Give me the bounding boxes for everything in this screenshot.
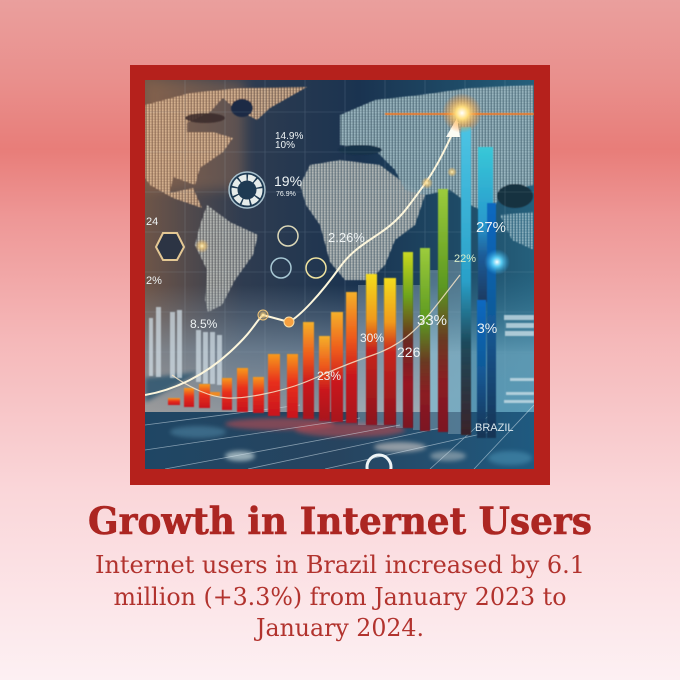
flare at arrow tip xyxy=(385,93,534,133)
chart percentage labels: 226 xyxy=(397,344,421,360)
bar chart xyxy=(168,127,496,438)
chart percentage labels: BRAZIL xyxy=(475,422,514,434)
chart percentage labels: 3% xyxy=(477,320,497,336)
map grid xyxy=(145,80,534,353)
chart percentage labels: 19% xyxy=(274,173,302,189)
chart percentage labels: 10% xyxy=(275,140,295,151)
bar: red group xyxy=(168,354,298,418)
map: North America xyxy=(145,87,307,208)
chart percentage labels: 23% xyxy=(317,369,341,383)
floor panel xyxy=(145,412,534,470)
chart percentage labels: 22% xyxy=(454,253,476,265)
red frame xyxy=(130,65,550,485)
framed chart illustration xyxy=(130,65,550,485)
bright pale stripes between bars xyxy=(358,260,461,434)
bar: yellow group xyxy=(366,274,396,425)
chart percentage labels: 76.9% xyxy=(276,191,296,198)
grey background bars xyxy=(149,307,222,385)
growth curve with arrow xyxy=(145,118,460,395)
chart percentage labels: 2% xyxy=(146,275,162,287)
chart percentage labels: 2.26% xyxy=(328,230,365,245)
description text: January 2024. xyxy=(253,614,424,642)
chart percentage labels: 33% xyxy=(417,312,447,329)
hazy lower band xyxy=(145,293,438,412)
bar: orange group xyxy=(303,292,357,423)
ring gauge icon xyxy=(229,172,265,208)
map and chart nodes xyxy=(196,240,208,252)
map: Africa and Middle East xyxy=(300,160,425,280)
map: South America xyxy=(195,205,258,312)
heading: Growth in Internet Users xyxy=(88,499,592,543)
chart percentage labels: 24 xyxy=(146,216,158,228)
hexagon icons xyxy=(156,226,326,278)
description text: Internet users in Brazil increased by 6.1 xyxy=(95,551,585,579)
chart percentage labels: 8.5% xyxy=(190,317,218,331)
chart percentage labels: 27% xyxy=(476,219,506,236)
floor ring icon xyxy=(366,454,392,469)
world map xyxy=(145,85,534,312)
description text: million (+3.3%) from January 2023 to xyxy=(114,583,566,611)
right side decorative bars xyxy=(504,315,534,403)
bar: green group xyxy=(403,189,448,432)
map: Eurasia xyxy=(340,85,534,250)
floor perspective lines xyxy=(145,405,534,469)
chart percentage labels xyxy=(146,131,514,434)
secondary trend line xyxy=(172,275,460,398)
chart percentage labels: 30% xyxy=(360,331,384,345)
illustration: world map and growth chart xyxy=(145,80,534,479)
floor reflections xyxy=(170,418,532,465)
description text xyxy=(95,551,585,642)
bar: blue group xyxy=(461,127,496,438)
chart percentage labels: 14.9% xyxy=(275,131,303,142)
